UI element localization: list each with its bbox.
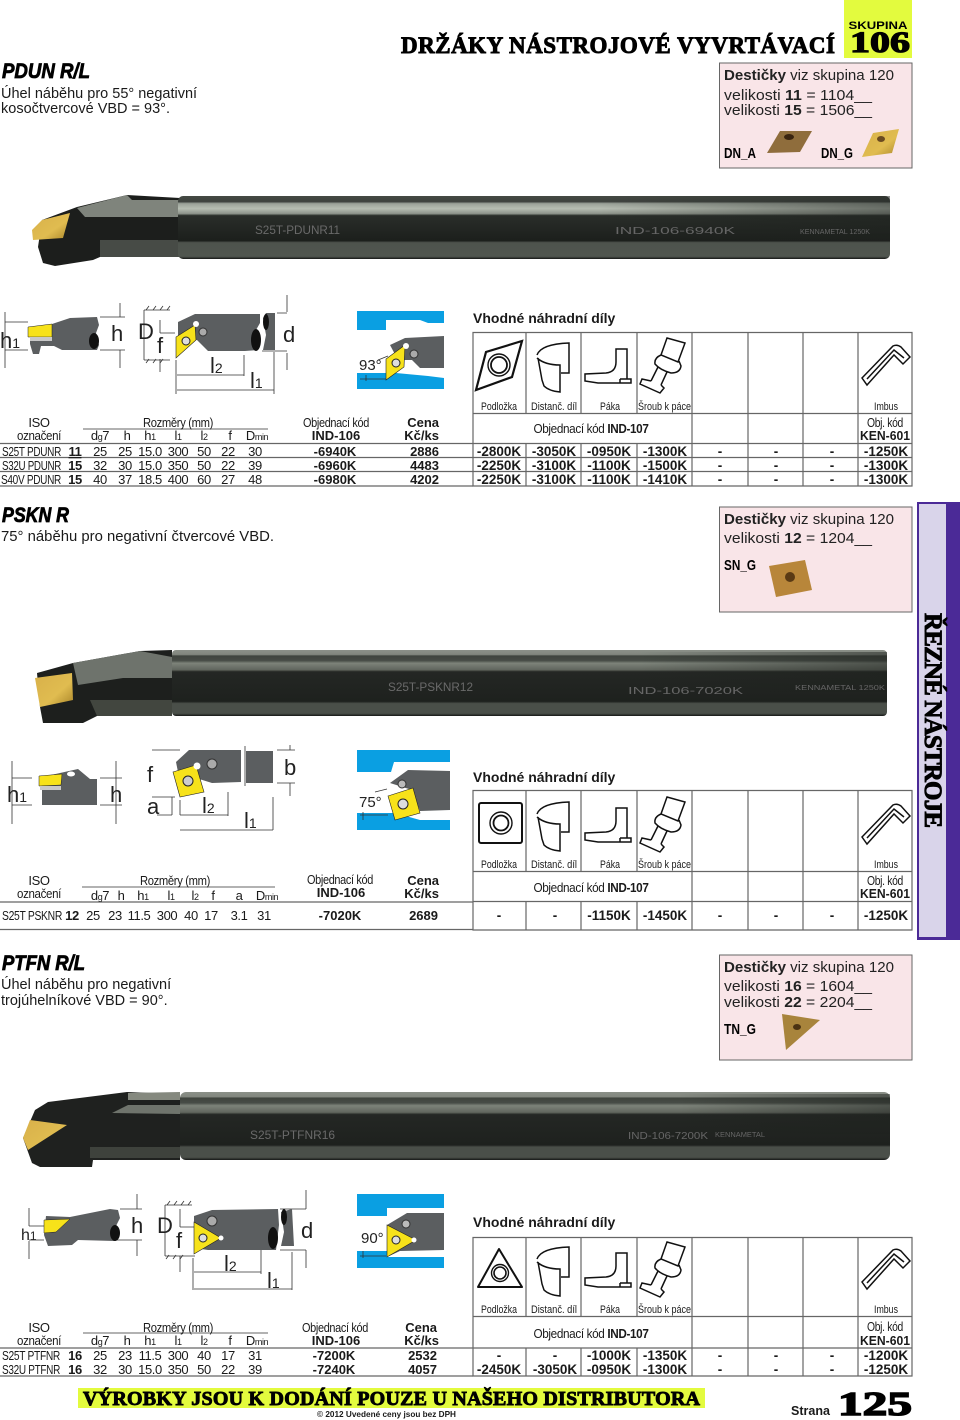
table: PDUN data: 18.5 bbox=[138, 472, 162, 487]
table: PDUN data: Cena bbox=[407, 415, 440, 430]
photo: tool PSKN: IND-106-7020K bbox=[628, 686, 744, 697]
photo: tool PDUN: S25T-PDUNR11 bbox=[255, 223, 340, 237]
drawing: boring 90 degrees: 90° bbox=[361, 1230, 384, 1247]
table: PSKN spare parts: - bbox=[718, 908, 722, 923]
table: PTFN spare parts: -2450K bbox=[477, 1362, 521, 1377]
panel: destičky PTFN: Destičky viz skupina 120 bbox=[724, 959, 894, 976]
table: PSKN data: Kč/ks bbox=[404, 886, 439, 901]
side tab: řezné nástroje bbox=[917, 502, 960, 940]
photo: tool PTFN: KENNAMETAL bbox=[715, 1132, 765, 1139]
table: PDUN data: 22 bbox=[221, 458, 235, 473]
table: PDUN data: 40 bbox=[93, 472, 107, 487]
drawing: side view PDUN bbox=[0, 303, 125, 368]
table: PDUN data: 4483 bbox=[410, 458, 439, 473]
table: PTFN spare parts: Imbus bbox=[874, 1304, 898, 1316]
panel: destičky PSKN: velikosti 12 = 1204__ bbox=[724, 530, 873, 547]
table: PSKN spare parts: Obj. kód bbox=[867, 873, 903, 888]
table: PSKN data: 31 bbox=[257, 908, 271, 923]
table: PSKN data: a bbox=[236, 888, 244, 903]
heading PSKN R: PSKN R bbox=[2, 504, 70, 527]
table: PSKN spare parts: -1450K bbox=[643, 908, 687, 923]
page number bbox=[791, 1386, 912, 1420]
table: PDUN spare parts: -3050K bbox=[532, 444, 576, 459]
table: PDUN data: 15.0 bbox=[138, 458, 162, 473]
table: PDUN data: Kč/ks bbox=[404, 428, 439, 443]
table: PTFN data: označení bbox=[17, 1333, 62, 1348]
table: PSKN spare parts: Imbus bbox=[874, 859, 898, 871]
table: PTFN data: 30 bbox=[118, 1362, 132, 1377]
table: PTFN spare parts: - bbox=[497, 1348, 501, 1363]
table: PTFN spare parts: - bbox=[718, 1348, 722, 1363]
table: PSKN data: h1 bbox=[137, 888, 149, 903]
table: PSKN data: 2689 bbox=[409, 908, 438, 923]
table: PDUN data: S32U PDUNR bbox=[2, 458, 61, 473]
table: PSKN data: f bbox=[211, 888, 215, 903]
table: PDUN spare parts: -1100K bbox=[587, 472, 631, 487]
section PTFN bbox=[0, 952, 912, 1377]
table: PTFN data: S32U PTFNR bbox=[2, 1362, 60, 1377]
table: PTFN spare parts: Páka bbox=[600, 1304, 621, 1316]
drawing: side view PDUN: h bbox=[111, 321, 123, 346]
table: PTFN spare parts: Obj. kód bbox=[867, 1319, 903, 1334]
section PDUN bbox=[0, 60, 912, 487]
table: PSKN data bbox=[0, 872, 473, 930]
table: PDUN data: 25 bbox=[93, 444, 107, 459]
table: PSKN data: IND-106 bbox=[317, 885, 365, 900]
table: PTFN data: 2532 bbox=[408, 1348, 437, 1363]
table: PTFN data: 300 bbox=[168, 1348, 188, 1363]
table: PTFN data: 22 bbox=[221, 1362, 235, 1377]
table: PSKN data: 12 bbox=[65, 908, 79, 923]
table: PDUN data: 15 bbox=[68, 472, 82, 487]
table: PDUN data: l1 bbox=[174, 428, 182, 443]
drawing: top view PSKN: l2 bbox=[202, 793, 215, 818]
main title: DRŽÁKY NÁSTROJOVÉ VYVRTÁVACÍ bbox=[401, 32, 835, 58]
table: PTFN data: Kč/ks bbox=[404, 1333, 439, 1348]
panel: destičky PDUN: DN_G bbox=[821, 145, 853, 162]
table: PSKN spare parts: -1150K bbox=[587, 908, 631, 923]
panel: destičky PDUN: velikosti 15 = 1506__ bbox=[724, 102, 873, 119]
table: PDUN data: dg7 bbox=[91, 428, 109, 443]
table: PDUN spare parts: Páka bbox=[600, 401, 621, 413]
photo: tool PDUN: KENNAMETAL 1250K bbox=[800, 229, 870, 236]
table: PSKN data: 23 bbox=[108, 908, 122, 923]
table: PTFN data: ISO bbox=[28, 1320, 50, 1335]
table: PTFN data: 11.5 bbox=[139, 1348, 162, 1363]
table: PDUN spare parts: -3100K bbox=[532, 472, 576, 487]
table: PTFN data: 15.0 bbox=[138, 1362, 162, 1377]
table: PDUN spare parts: -0950K bbox=[587, 444, 631, 459]
table: PDUN data: 4202 bbox=[410, 472, 439, 487]
drawing: top view PTFN: l1 bbox=[267, 1268, 280, 1293]
table: PTFN data: 25 bbox=[93, 1348, 107, 1363]
drawing: top view PTFN: f bbox=[176, 1228, 183, 1253]
table: PDUN spare parts: -1300K bbox=[864, 458, 908, 473]
photo: tool PSKN: KENNAMETAL 1250K bbox=[795, 685, 885, 692]
table: PTFN data: S25T PTFNR bbox=[2, 1348, 60, 1363]
table: PSKN spare parts bbox=[473, 790, 912, 930]
table: PDUN data: h1 bbox=[144, 428, 156, 443]
table: PDUN data: 22 bbox=[221, 444, 235, 459]
table: PDUN spare parts: Šroub k páce bbox=[638, 400, 691, 413]
table: PTFN spare parts: - bbox=[718, 1362, 722, 1377]
table: PSKN data: Objednací kód bbox=[307, 872, 373, 887]
table: PTFN data: 16 bbox=[68, 1348, 82, 1363]
table: PDUN data: 50 bbox=[197, 458, 211, 473]
table: PTFN data: Dmin bbox=[246, 1333, 269, 1348]
table: PTFN data: 4057 bbox=[408, 1362, 437, 1377]
table: PSKN spare parts: KEN-601 bbox=[860, 886, 910, 901]
panel: destičky PDUN: DN_A bbox=[724, 145, 756, 162]
heading: spare parts: Vhodné náhradní díly bbox=[473, 310, 616, 326]
skupina badge bbox=[844, 0, 912, 59]
table: PTFN spare parts: Šroub k páce bbox=[638, 1303, 691, 1316]
table: PDUN spare parts: -2800K bbox=[477, 444, 521, 459]
drawing: side view PDUN: h1 bbox=[0, 328, 20, 353]
table: PDUN data: 30 bbox=[118, 458, 132, 473]
table: PSKN spare parts: Podložka bbox=[481, 859, 518, 871]
table: PDUN spare parts bbox=[473, 332, 912, 487]
drawing: top view PSKN: f bbox=[147, 762, 154, 787]
description PTFN: Úhel náběhu pro negativní bbox=[1, 977, 171, 993]
drawing: side view PTFN bbox=[21, 1194, 143, 1259]
table: PTFN spare parts: -0950K bbox=[587, 1362, 631, 1377]
heading: spare parts: Vhodné náhradní díly bbox=[473, 1214, 616, 1230]
table: PDUN spare parts: - bbox=[718, 444, 722, 459]
panel: destičky PSKN bbox=[720, 507, 912, 612]
heading: spare parts: Vhodné náhradní díly bbox=[473, 769, 616, 785]
table: PTFN data: 32 bbox=[93, 1362, 107, 1377]
side tab: řezné nástroje: ŘEZNÉ NÁSTROJE bbox=[919, 613, 947, 828]
table: PSKN data: S25T PSKNR bbox=[2, 908, 62, 923]
drawing: top view PDUN: f bbox=[157, 333, 164, 358]
drawing: top view PTFN: l2 bbox=[224, 1251, 237, 1276]
table: PDUN data: Rozměry (mm) bbox=[143, 415, 213, 430]
table: PDUN spare parts: -2250K bbox=[477, 472, 521, 487]
table: PDUN spare parts: -3100K bbox=[532, 458, 576, 473]
drawing: top view PTFN bbox=[157, 1190, 313, 1293]
table: PTFN data: Cena bbox=[405, 1320, 438, 1335]
table: PDUN data: 300 bbox=[168, 444, 188, 459]
table: PTFN spare parts: KEN-601 bbox=[860, 1333, 910, 1348]
table: PSKN data: Rozměry (mm) bbox=[140, 873, 210, 888]
table: PDUN data: Objednací kód bbox=[303, 415, 369, 430]
skupina badge: 106 bbox=[850, 26, 910, 59]
table: PTFN data: 17 bbox=[221, 1348, 235, 1363]
table: PTFN data: -7200K bbox=[313, 1348, 356, 1363]
table: PSKN data: 40 bbox=[184, 908, 198, 923]
table: PDUN data: 15.0 bbox=[138, 444, 162, 459]
table: PSKN data: Cena bbox=[407, 873, 440, 888]
panel: destičky PTFN: velikosti 16 = 1604__ bbox=[724, 978, 873, 995]
table: PSKN data: 3.1 bbox=[231, 908, 248, 923]
page number: Strana bbox=[791, 1403, 831, 1418]
table: PTFN data: dg7 bbox=[91, 1333, 109, 1348]
drawing: top view PDUN: D bbox=[138, 319, 154, 344]
panel: destičky PTFN: TN_G bbox=[724, 1021, 756, 1038]
table: PDUN data: -6980K bbox=[314, 472, 357, 487]
footer banner: VÝROBKY JSOU K DODÁNÍ POUZE U NAŠEHO DISTRIBUTORA bbox=[83, 1386, 701, 1410]
table: PDUN data: IND-106 bbox=[312, 428, 360, 443]
table: PDUN spare parts: - bbox=[830, 458, 834, 473]
table: PTFN spare parts: Objednací kód IND-107 bbox=[534, 1326, 649, 1341]
table: PDUN spare parts: -1500K bbox=[643, 458, 687, 473]
table: PDUN spare parts: - bbox=[718, 472, 722, 487]
photo: tool PDUN bbox=[32, 195, 890, 266]
table: PTFN data: -7240K bbox=[313, 1362, 356, 1377]
table: PDUN spare parts: KEN-601 bbox=[860, 428, 910, 443]
table: PDUN data: h bbox=[124, 428, 131, 443]
table: PSKN spare parts: - bbox=[830, 908, 834, 923]
panel: destičky PSKN: SN_G bbox=[724, 557, 756, 574]
table: PTFN data: 39 bbox=[248, 1362, 262, 1377]
drawing: top view PDUN: d bbox=[283, 322, 295, 347]
table: PTFN data: Rozměry (mm) bbox=[143, 1320, 213, 1335]
description PDUN: kosočtvercové VBD = 93°. bbox=[1, 101, 170, 117]
drawing: boring 90 degrees bbox=[357, 1194, 444, 1268]
table: PTFN spare parts: -1350K bbox=[643, 1348, 687, 1363]
table: PTFN spare parts: -1300K bbox=[643, 1362, 687, 1377]
table: PDUN spare parts: Objednací kód IND-107 bbox=[534, 421, 649, 436]
drawing: top view PSKN: l1 bbox=[244, 808, 257, 833]
table: PDUN data: 27 bbox=[221, 472, 235, 487]
table: PDUN spare parts: -1300K bbox=[643, 444, 687, 459]
drawing: top view PDUN: l2 bbox=[210, 353, 223, 378]
table: PDUN spare parts: Distanč. díl bbox=[531, 401, 577, 413]
copyright note: © 2012 Uvedené ceny jsou bez DPH bbox=[317, 1409, 456, 1419]
table: PTFN data: IND-106 bbox=[312, 1333, 360, 1348]
table: PDUN data bbox=[0, 415, 473, 487]
drawing: side view PSKN bbox=[7, 761, 122, 824]
table: PSKN data: označení bbox=[17, 886, 62, 901]
table: PTFN data: l2 bbox=[200, 1333, 208, 1348]
drawing: top view PSKN: b bbox=[284, 755, 296, 780]
table: PSKN data: 300 bbox=[157, 908, 177, 923]
table: PTFN data: 50 bbox=[197, 1362, 211, 1377]
table: PTFN spare parts: Distanč. díl bbox=[531, 1304, 577, 1316]
table: PTFN data: Objednací kód bbox=[302, 1320, 368, 1335]
table: PTFN spare parts: -1200K bbox=[864, 1348, 908, 1363]
table: PDUN spare parts: - bbox=[830, 472, 834, 487]
table: PSKN data: Dmin bbox=[256, 888, 279, 903]
panel: destičky PTFN bbox=[720, 955, 912, 1060]
table: PTFN data: 31 bbox=[248, 1348, 262, 1363]
drawing: side view PSKN: h1 bbox=[7, 782, 27, 807]
table: PTFN spare parts: -3050K bbox=[533, 1362, 577, 1377]
table: PTFN spare parts: Podložka bbox=[481, 1304, 518, 1316]
table: PDUN spare parts: - bbox=[774, 444, 778, 459]
table: PDUN data: S40V PDUNR bbox=[1, 472, 61, 487]
panel: destičky PDUN: velikosti 11 = 1104__ bbox=[724, 87, 873, 104]
table: PDUN data: ISO bbox=[28, 415, 50, 430]
table: PTFN spare parts: -1000K bbox=[587, 1348, 631, 1363]
drawing: top view PTFN: d bbox=[301, 1218, 313, 1243]
table: PSKN spare parts: -1250K bbox=[864, 908, 908, 923]
drawing: side view PSKN: h bbox=[110, 782, 122, 807]
drawing: side view PTFN: h1 bbox=[21, 1227, 37, 1244]
table: PDUN data: 37 bbox=[118, 472, 132, 487]
table: PDUN spare parts: -1300K bbox=[864, 472, 908, 487]
section PSKN bbox=[0, 504, 912, 930]
table: PDUN data: 25 bbox=[118, 444, 132, 459]
table: PSKN spare parts: - bbox=[497, 908, 501, 923]
drawing: boring 75 degrees bbox=[357, 750, 450, 830]
table: PDUN data: 30 bbox=[248, 444, 262, 459]
table: PTFN data: 40 bbox=[197, 1348, 211, 1363]
table: PDUN data: označení bbox=[17, 428, 62, 443]
table: PTFN data: 23 bbox=[118, 1348, 132, 1363]
table: PTFN data: h1 bbox=[144, 1333, 156, 1348]
table: PTFN data: 16 bbox=[68, 1362, 82, 1377]
table: PDUN spare parts: -1100K bbox=[587, 458, 631, 473]
heading PTFN R/L: PTFN R/L bbox=[2, 952, 85, 975]
table: PTFN spare parts: - bbox=[830, 1348, 834, 1363]
table: PDUN spare parts: Podložka bbox=[481, 401, 518, 413]
description PDUN: Úhel náběhu pro 55° negativní bbox=[1, 86, 197, 102]
table: PDUN data: 39 bbox=[248, 458, 262, 473]
table: PSKN data: ISO bbox=[28, 873, 50, 888]
table: PTFN spare parts: - bbox=[774, 1348, 778, 1363]
table: PDUN data: Dmin bbox=[246, 428, 269, 443]
table: PTFN spare parts bbox=[473, 1237, 912, 1377]
table: PDUN spare parts: -2250K bbox=[477, 458, 521, 473]
photo: tool PTFN bbox=[23, 1092, 890, 1167]
table: PDUN spare parts: - bbox=[774, 472, 778, 487]
table: PSKN spare parts: Distanč. díl bbox=[531, 859, 577, 871]
table: PSKN spare parts: Objednací kód IND-107 bbox=[534, 880, 649, 895]
table: PDUN data: f bbox=[228, 428, 232, 443]
table: PTFN data bbox=[0, 1320, 473, 1377]
table: PDUN data: 350 bbox=[168, 458, 188, 473]
table: PDUN data: 60 bbox=[197, 472, 211, 487]
table: PDUN spare parts: - bbox=[830, 444, 834, 459]
drawing: boring 93 degrees bbox=[357, 311, 444, 389]
table: PDUN spare parts: Obj. kód bbox=[867, 415, 903, 430]
drawing: boring 75 degrees: 75° bbox=[359, 794, 382, 811]
table: PDUN data: -6940K bbox=[314, 444, 357, 459]
photo: tool PSKN bbox=[35, 650, 887, 723]
table: PDUN data: l2 bbox=[200, 428, 208, 443]
skupina badge: SKUPINA bbox=[848, 20, 908, 32]
drawing: top view PTFN: D bbox=[157, 1213, 173, 1238]
photo: tool PTFN: S25T-PTFNR16 bbox=[250, 1128, 335, 1142]
table: PDUN data: S25T PDUNR bbox=[2, 444, 61, 459]
table: PDUN spare parts: - bbox=[774, 458, 778, 473]
table: PDUN data: 400 bbox=[168, 472, 188, 487]
table: PTFN data: l1 bbox=[174, 1333, 182, 1348]
drawing: top view PSKN bbox=[147, 745, 296, 833]
table: PSKN spare parts: - bbox=[553, 908, 557, 923]
table: PTFN data: f bbox=[228, 1333, 232, 1348]
table: PSKN spare parts: Páka bbox=[600, 859, 621, 871]
table: PDUN data: 50 bbox=[197, 444, 211, 459]
drawing: boring 93 degrees: 93° bbox=[359, 357, 382, 374]
table: PSKN data: dg7 bbox=[91, 888, 109, 903]
table: PDUN data: 48 bbox=[248, 472, 262, 487]
table: PTFN data: 350 bbox=[168, 1362, 188, 1377]
panel: destičky PTFN: velikosti 22 = 2204__ bbox=[724, 994, 873, 1011]
table: PDUN spare parts: - bbox=[718, 458, 722, 473]
table: PDUN data: 11 bbox=[69, 444, 82, 459]
table: PDUN data: 2886 bbox=[410, 444, 439, 459]
drawing: top view PDUN: l1 bbox=[250, 368, 263, 393]
drawing: top view PSKN: a bbox=[147, 794, 160, 819]
table: PSKN spare parts: Šroub k páce bbox=[638, 858, 691, 871]
table: PTFN spare parts: - bbox=[774, 1362, 778, 1377]
table: PSKN spare parts: - bbox=[774, 908, 778, 923]
table: PDUN data: -6960K bbox=[314, 458, 357, 473]
table: PSKN data: 17 bbox=[204, 908, 218, 923]
table: PSKN data: 11.5 bbox=[128, 908, 151, 923]
table: PDUN data: 32 bbox=[93, 458, 107, 473]
table: PDUN spare parts: -1250K bbox=[864, 444, 908, 459]
drawing: top view PDUN bbox=[138, 295, 295, 394]
description PSKN: 75° náběhu pro negativní čtvercové VBD. bbox=[1, 529, 274, 545]
photo: tool PTFN: IND-106-7200K bbox=[628, 1131, 708, 1142]
table: PTFN spare parts: - bbox=[830, 1362, 834, 1377]
drawing: side view PTFN: h bbox=[131, 1213, 143, 1238]
table: PSKN data: -7020K bbox=[319, 908, 362, 923]
description PTFN: trojúhelníkové VBD = 90°. bbox=[1, 993, 168, 1009]
panel: destičky PSKN: Destičky viz skupina 120 bbox=[724, 511, 894, 528]
table: PDUN spare parts: Imbus bbox=[874, 401, 898, 413]
table: PDUN spare parts: -1410K bbox=[643, 472, 687, 487]
table: PSKN data: l2 bbox=[191, 888, 199, 903]
panel: destičky PDUN bbox=[720, 63, 912, 168]
panel: destičky PDUN: Destičky viz skupina 120 bbox=[724, 67, 894, 84]
photo: tool PDUN: IND-106-6940K bbox=[615, 226, 736, 237]
photo: tool PSKN: S25T-PSKNR12 bbox=[388, 680, 473, 694]
table: PTFN spare parts: -1250K bbox=[864, 1362, 908, 1377]
table: PSKN data: h bbox=[118, 888, 125, 903]
table: PSKN data: 25 bbox=[86, 908, 100, 923]
table: PDUN data: 15 bbox=[68, 458, 82, 473]
table: PSKN data: l1 bbox=[167, 888, 175, 903]
table: PTFN data: h bbox=[124, 1333, 131, 1348]
heading PDUN R/L: PDUN R/L bbox=[2, 60, 90, 83]
table: PTFN spare parts: - bbox=[553, 1348, 557, 1363]
